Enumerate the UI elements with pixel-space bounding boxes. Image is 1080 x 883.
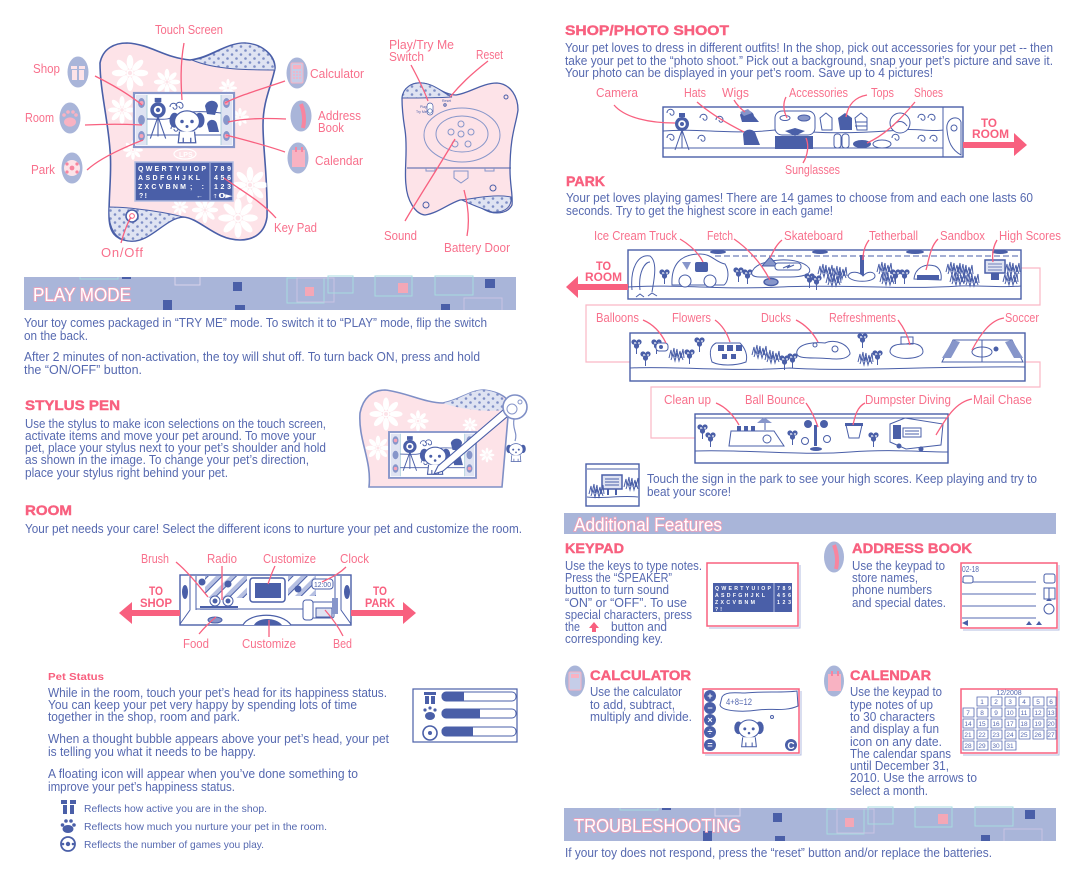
shop screen <box>663 107 963 157</box>
label: refreshments: Refreshments <box>829 310 896 325</box>
label: address book: Book <box>318 120 344 135</box>
text: calendar: and display a fun <box>850 722 939 736</box>
keypad: QWERTYUIOP <box>138 166 206 173</box>
text: room intro: Your pet needs your care! Select the different icons to nurture your pet and customize the room. <box>25 522 522 536</box>
text: keypad <box>565 559 702 646</box>
heading: play mode: PLAY MODE <box>33 285 131 305</box>
icon: calendar <box>288 142 308 174</box>
calendar screen: 24 <box>1006 732 1014 739</box>
logo <box>174 149 196 159</box>
text: calendar: select a month. <box>850 784 928 798</box>
illustration: stylus on toy <box>360 390 527 487</box>
text: address book: and special dates. <box>852 596 946 610</box>
label: park direction: PARK <box>365 598 396 610</box>
calendar screen: 22 <box>978 732 986 739</box>
text: keypad: Press the “SPEAKER” <box>565 571 672 585</box>
leader lines <box>643 239 1004 435</box>
play switch: Reset <box>442 99 451 103</box>
logo: LPS <box>179 152 193 159</box>
keypad: ZXCVBNM <box>138 184 186 191</box>
text: play mode instructions: After 2 minutes of non-activation, the toy will shut off. To turn back ON, press and hold <box>24 350 480 364</box>
label: shop direction: SHOP <box>140 598 172 610</box>
calendar screen: 14 <box>964 721 972 728</box>
dotted corner top right <box>192 43 275 70</box>
arrow: to shop <box>119 602 180 624</box>
label: skateboard: Skateboard <box>784 228 843 243</box>
label: tops: Tops <box>871 85 894 100</box>
text: shop intro: take your pet to the “photo shoot.” Pick out a background, snap your pet’s picture and save it. <box>565 54 1053 68</box>
calendar screen: 31 <box>1006 743 1014 750</box>
text: pet status: When a thought bubble appears above your pet’s head, your pet <box>48 732 389 746</box>
calendar screen: 25 <box>1020 732 1028 739</box>
heading: calculator: CALCULATOR <box>590 667 691 683</box>
keypad: ↑0▸ <box>212 193 233 200</box>
text: calendar: to 30 characters <box>850 710 935 724</box>
calendar screen: 16 <box>992 721 1000 728</box>
label: clock: Clock <box>340 551 369 566</box>
calendar screen: 21 <box>964 732 972 739</box>
label: sunglasses: Sunglasses <box>785 162 840 177</box>
panel: calculator feature <box>565 666 801 755</box>
label: food: Food <box>183 636 209 651</box>
calendar screen: 15 <box>978 721 986 728</box>
text: shop intro <box>565 41 1053 80</box>
label: touch screen: Touch Screen <box>155 22 223 37</box>
calendar screen: 27 <box>1047 732 1055 739</box>
calculator screen: ÷ <box>708 727 713 737</box>
play switch: Play <box>420 105 427 109</box>
text: park intro: seconds. Try to get the highest score in each game! <box>566 204 833 218</box>
icon: phone <box>824 542 844 572</box>
label: customize bottom: Customize <box>242 636 296 651</box>
label: balloons: Balloons <box>596 310 639 325</box>
text: address book: phone numbers <box>852 583 932 597</box>
text: calendar: type notes of up <box>850 698 933 712</box>
legend: room icon <box>61 819 76 833</box>
legend: shop icon <box>61 800 76 814</box>
text: pet status: is telling you what it needs to be happy. <box>48 745 256 759</box>
park screen one <box>628 250 1021 299</box>
leader lines <box>85 43 286 243</box>
label: reset: Reset <box>476 47 503 62</box>
text: stylus pen: activate items and move your pet around. To move your <box>25 429 316 443</box>
text: stylus pen: pet, place your stylus next to your pet’s shoulder and hold <box>25 441 326 455</box>
label: to room right: TO <box>981 118 997 130</box>
text: play mode instructions: the “ON/OFF” button. <box>24 363 142 377</box>
label: play try me switch: Switch <box>389 49 424 64</box>
text: calendar: Use the keypad to <box>850 685 942 699</box>
text: address book <box>852 559 946 610</box>
arrow: to park <box>351 602 416 624</box>
calculator screen: + <box>707 691 713 701</box>
calendar screen: 19 <box>1034 721 1042 728</box>
icon: calculator <box>565 666 585 696</box>
text: keypad: button to turn sound <box>565 583 669 597</box>
calendar screen: 29 <box>978 743 986 750</box>
legend: park icon <box>61 837 75 851</box>
keypad: 789 <box>214 166 231 173</box>
arrow: to room right <box>963 133 1027 156</box>
calendar screen: 17 <box>1006 721 1014 728</box>
label: to room left: TO <box>596 261 611 273</box>
calendar screen: 4 <box>1022 699 1026 706</box>
heading: pet status: Pet Status <box>48 671 104 683</box>
text: high score tip <box>647 472 1037 499</box>
text: pet status: While in the room, touch your pet’s head for its happiness status. <box>48 686 387 700</box>
text: pet status: A floating icon will appear when you’ve done something to <box>48 767 358 781</box>
label: accessories: Accessories <box>789 85 848 100</box>
text: pet status: together in the shop, room and park. <box>48 710 240 724</box>
text: calendar <box>850 685 977 798</box>
leader lines <box>176 562 346 637</box>
calendar screen: 18 <box>1020 721 1028 728</box>
label: camera: Camera <box>596 85 639 100</box>
text: pet status: improve your pet’s happiness status. <box>48 780 235 794</box>
calendar screen: 28 <box>964 743 972 750</box>
text: play mode instructions <box>24 316 487 377</box>
park screen three <box>695 414 948 463</box>
text: high score tip: beat your score! <box>647 485 731 499</box>
panel: additional features banner <box>564 513 1056 535</box>
label: park: Park <box>31 162 55 177</box>
calendar screen: 6 <box>1049 699 1053 706</box>
calculator screen: 4+8=12 <box>726 697 752 707</box>
text: park intro: Your pet loves playing games! There are 14 games to choose from and each one lasts 60 <box>566 191 1033 205</box>
text: calculator: to add, subtract, <box>590 698 675 712</box>
calculator screen: − <box>707 703 713 713</box>
text: keypad: corresponding key. <box>565 632 663 646</box>
text: stylus pen: Use the stylus to make icon selections on the touch screen, <box>25 417 326 431</box>
keypad image: ASDFGHJKL <box>715 593 766 599</box>
keypad image: QWERTYUIOP <box>715 586 772 592</box>
text: pet status: You can keep your pet very happy by spending lots of time <box>48 698 357 712</box>
keypad image: 456 <box>777 593 791 599</box>
label: flowers: Flowers <box>672 310 711 325</box>
panel: room scene diagram <box>119 551 416 651</box>
keypad image: ZXCVBNM <box>715 600 755 606</box>
calendar screen: 8 <box>980 710 984 717</box>
legend: room text: Reflects how much you nurture your pet in the room. <box>84 821 327 833</box>
battery door <box>407 95 511 208</box>
arrow: to room left <box>566 276 628 298</box>
label: room: Room <box>25 110 54 125</box>
heading: shop photo shoot: SHOP/PHOTO SHOOT <box>565 22 729 38</box>
text: address book: Use the keypad to <box>852 559 945 573</box>
label: calculator: Calculator <box>310 66 365 81</box>
park screen two <box>630 333 1025 381</box>
text: calculator: Use the calculator <box>590 685 682 699</box>
icon: shop <box>68 56 88 88</box>
calendar screen <box>961 689 1059 755</box>
label: address book: Address <box>318 108 361 123</box>
text: calendar: 2010. Use the arrows to <box>850 771 977 785</box>
label: on/off: On/Off <box>101 245 143 260</box>
calendar screen: 3 <box>1008 699 1012 706</box>
speaker <box>424 108 500 162</box>
connector lines <box>586 268 1040 438</box>
calculator screen <box>703 689 801 755</box>
dotted corner bottom left <box>109 207 183 241</box>
calendar screen: 7 <box>966 710 970 717</box>
calendar screen: 11 <box>1021 710 1028 717</box>
leader lines <box>405 61 488 236</box>
heading: room: ROOM <box>25 502 72 518</box>
room screen: 12:00 <box>314 580 331 589</box>
label: brush: Brush <box>141 551 169 566</box>
keypad <box>135 162 233 201</box>
panel: play mode banner <box>24 276 516 310</box>
icon: address book phone <box>290 100 312 132</box>
panel: calendar feature <box>824 666 1059 798</box>
label: tetherball: Tetherball <box>869 228 918 243</box>
calendar screen: 12 <box>1034 710 1042 717</box>
dotted corner top <box>402 83 452 98</box>
panel: troubleshooting banner <box>564 807 1056 841</box>
text: play mode instructions: on the back. <box>24 329 88 343</box>
label: dumpster diving: Dumpster Diving <box>865 392 951 407</box>
icon: room <box>60 102 80 134</box>
label: fetch: Fetch <box>707 228 733 243</box>
text: park intro <box>566 191 1033 218</box>
label: hats: Hats <box>684 85 706 100</box>
calculator screen: × <box>707 715 713 725</box>
calendar screen: 23 <box>992 732 1000 739</box>
address book screen: 02-18 <box>962 565 979 574</box>
label: mail chase: Mail Chase <box>973 392 1032 407</box>
label: radio: Radio <box>207 551 237 566</box>
calendar screen: 26 <box>1034 732 1042 739</box>
text: stylus pen: place your stylus right behind your pet. <box>25 466 228 480</box>
keypad: 456 <box>214 175 231 182</box>
label: calendar: Calendar <box>315 153 364 168</box>
label: bed: Bed <box>333 636 352 651</box>
calculator screen: C <box>787 741 795 752</box>
calendar screen: 13 <box>1047 710 1055 717</box>
label: soccer: Soccer <box>1005 310 1040 325</box>
text: high score tip: Touch the sign in the park to see your high scores. Keep playing and try to <box>647 472 1037 486</box>
label: to room right: ROOM <box>972 129 1009 141</box>
label: shop: Shop <box>33 61 60 76</box>
heading: keypad: KEYPAD <box>565 540 624 556</box>
address book screen <box>961 563 1059 630</box>
label: clean up: Clean up <box>664 392 711 407</box>
calendar screen: 30 <box>992 743 1000 750</box>
label: ball bounce: Ball Bounce <box>745 392 805 407</box>
label: customize top: Customize <box>263 551 316 566</box>
panel: park scene diagrams <box>566 228 1061 463</box>
text: calendar: icon on any date. <box>850 735 942 749</box>
panel: address book feature <box>824 540 1059 630</box>
label: to shop: TO <box>149 586 163 598</box>
calendar screen: 1 <box>980 699 984 706</box>
text: keypad: button and <box>611 620 667 634</box>
icon: park <box>62 152 82 184</box>
label: play try me switch: Play/Try Me <box>389 37 454 52</box>
text: keypad: “ON” or “OFF”. To use <box>565 596 687 610</box>
panel: shop scene diagram <box>596 85 1027 177</box>
play switch <box>416 99 451 115</box>
chart: happiness status bars <box>413 689 517 742</box>
text: pet status <box>48 686 389 794</box>
heading: park: PARK <box>566 173 605 189</box>
text: stylus pen <box>25 417 326 480</box>
heading: stylus pen: STYLUS PEN <box>25 397 120 413</box>
keypad: ASDFGHJKL <box>138 175 201 182</box>
keypad: ← <box>196 193 203 200</box>
icon: calendar <box>824 666 844 696</box>
keypad: ?! <box>139 193 147 200</box>
on/off button <box>126 210 138 222</box>
leader lines <box>614 95 915 163</box>
text: stylus pen: as shown in the image. To change your pet’s direction, <box>25 453 309 467</box>
calculator screen: = <box>707 740 713 750</box>
device body back <box>402 83 518 215</box>
icon: calculator <box>286 58 308 88</box>
label: ice cream truck: Ice Cream Truck <box>594 228 677 243</box>
keypad image: ?! <box>715 607 722 613</box>
device body front <box>100 43 275 241</box>
legend: shop text: Reflects how active you are in the shop. <box>84 803 267 815</box>
room screen <box>180 575 351 625</box>
icon: shift arrow <box>589 622 599 632</box>
label: sandbox: Sandbox <box>940 228 985 243</box>
panel: keypad feature <box>565 540 800 646</box>
calendar screen: 10 <box>1006 710 1014 717</box>
text: calculator <box>590 685 692 724</box>
label: key pad: Key Pad <box>274 220 317 235</box>
text: keypad: special characters, press <box>565 608 692 622</box>
heading: address book: ADDRESS BOOK <box>852 540 972 556</box>
text: calculator: multiply and divide. <box>590 710 692 724</box>
text: troubleshooting: If your toy does not respond, press the “reset” button and/or replace the batteries. <box>565 846 992 860</box>
keypad image: 123 <box>777 600 791 606</box>
illustration: high score sign <box>586 464 639 506</box>
keypad: 123 <box>214 184 231 191</box>
heading: calendar: CALENDAR <box>850 667 931 683</box>
label: wigs: Wigs <box>722 85 749 100</box>
calendar screen: 20 <box>1047 721 1055 728</box>
text: address book: store names, <box>852 571 918 585</box>
keypad image: 789 <box>777 586 791 592</box>
play switch: Try Me <box>416 110 427 114</box>
label: sound: Sound <box>384 228 417 243</box>
keypad: ; : <box>190 184 204 191</box>
calendar screen: 2 <box>994 699 998 706</box>
text: play mode instructions: Your toy comes packaged in “TRY ME” mode. To switch it to “PLAY” mode, flip the switch <box>24 316 487 330</box>
text: shop intro: Your pet loves to dress in different outfits! In the shop, pick out accessories for your pet -- then <box>565 41 1053 55</box>
text: shop intro: Your photo can be displayed in your pet’s room. Save up to 4 pictures! <box>565 66 933 80</box>
touch screen <box>134 93 234 147</box>
calendar screen: 9 <box>994 710 998 717</box>
text: calendar: The calendar spans <box>850 747 951 761</box>
heading: troubleshooting: TROUBLESHOOTING <box>574 816 741 836</box>
legend: park text: Reflects the number of games you play. <box>84 839 264 851</box>
calendar screen: 12/2008 <box>996 690 1022 697</box>
heading: additional features: Additional Features <box>574 515 722 535</box>
calendar screen: 5 <box>1036 699 1040 706</box>
panel: front of toy diagram <box>25 22 365 260</box>
label: ducks: Ducks <box>761 310 791 325</box>
keypad image <box>707 563 800 628</box>
text: calendar: until December 31, <box>850 759 949 773</box>
dotted corner bottom <box>462 196 511 212</box>
decorative flowers <box>108 55 268 238</box>
text: keypad: the <box>565 620 580 634</box>
text: keypad: Use the keys to type notes. <box>565 559 702 573</box>
label: to park: TO <box>373 586 387 598</box>
label: high scores: High Scores <box>999 228 1061 243</box>
label: to room left: ROOM <box>585 272 622 284</box>
label: battery door: Battery Door <box>444 240 511 255</box>
panel: back of toy diagram <box>384 37 518 255</box>
label: shoes: Shoes <box>914 85 943 100</box>
